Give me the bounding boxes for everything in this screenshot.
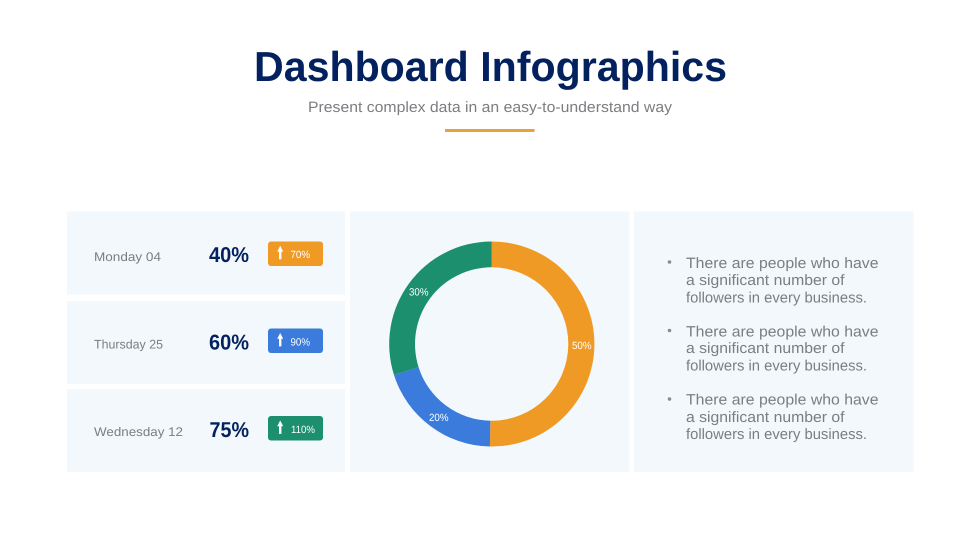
badge: up 70%: 70% (290, 249, 310, 261)
day label: Monday 04 (94, 250, 161, 264)
badge: up 90% (268, 328, 323, 353)
bullet paragraph 3: There are people who have (686, 392, 878, 408)
panel: Monday 04 (67, 212, 345, 294)
bullet paragraph 1: a significant number of (686, 272, 845, 289)
segment: 20% blue (394, 367, 490, 446)
bullet paragraph 2: There are people who have (686, 324, 878, 340)
subtitle: Present complex data in an easy-to-understand way (308, 99, 673, 116)
segment: 50% orange (490, 241, 594, 446)
panel: Wednesday 12 (67, 389, 345, 472)
bullet paragraph 2 (668, 324, 878, 374)
accent underline (445, 129, 534, 132)
bullet paragraph 1: There are people who have (686, 255, 878, 272)
badge: up 110%: 110% (291, 424, 315, 436)
title: Dashboard Infographics (254, 43, 727, 90)
label: 20%: 20% (429, 412, 448, 424)
bullet paragraph 3: followers in every business. (686, 426, 867, 443)
bullet paragraph 1 (668, 255, 878, 306)
percentage: 75% (210, 418, 249, 442)
badge: up 70% (268, 242, 323, 266)
panel: donut chart (350, 212, 630, 472)
day label: Wednesday 12 (94, 425, 183, 439)
percentage: 40% (209, 243, 249, 267)
bullet paragraph 2: followers in every business. (686, 358, 867, 374)
bullet paragraph 1: followers in every business. (686, 290, 867, 306)
bullet paragraph 3 (668, 392, 878, 443)
panel: Thursday 25 (67, 301, 345, 384)
segment: 30% green (389, 242, 492, 375)
bullet paragraph 2: a significant number of (686, 340, 845, 357)
label: 30%: 30% (409, 286, 428, 298)
day label: Thursday 25 (94, 338, 163, 352)
badge: up 110% (268, 416, 323, 440)
badge: up 90%: 90% (290, 336, 310, 348)
panel: bullet text (634, 212, 914, 472)
label: 50%: 50% (572, 340, 592, 352)
bullet paragraph 3: a significant number of (686, 409, 845, 426)
percentage: 60% (209, 330, 249, 354)
